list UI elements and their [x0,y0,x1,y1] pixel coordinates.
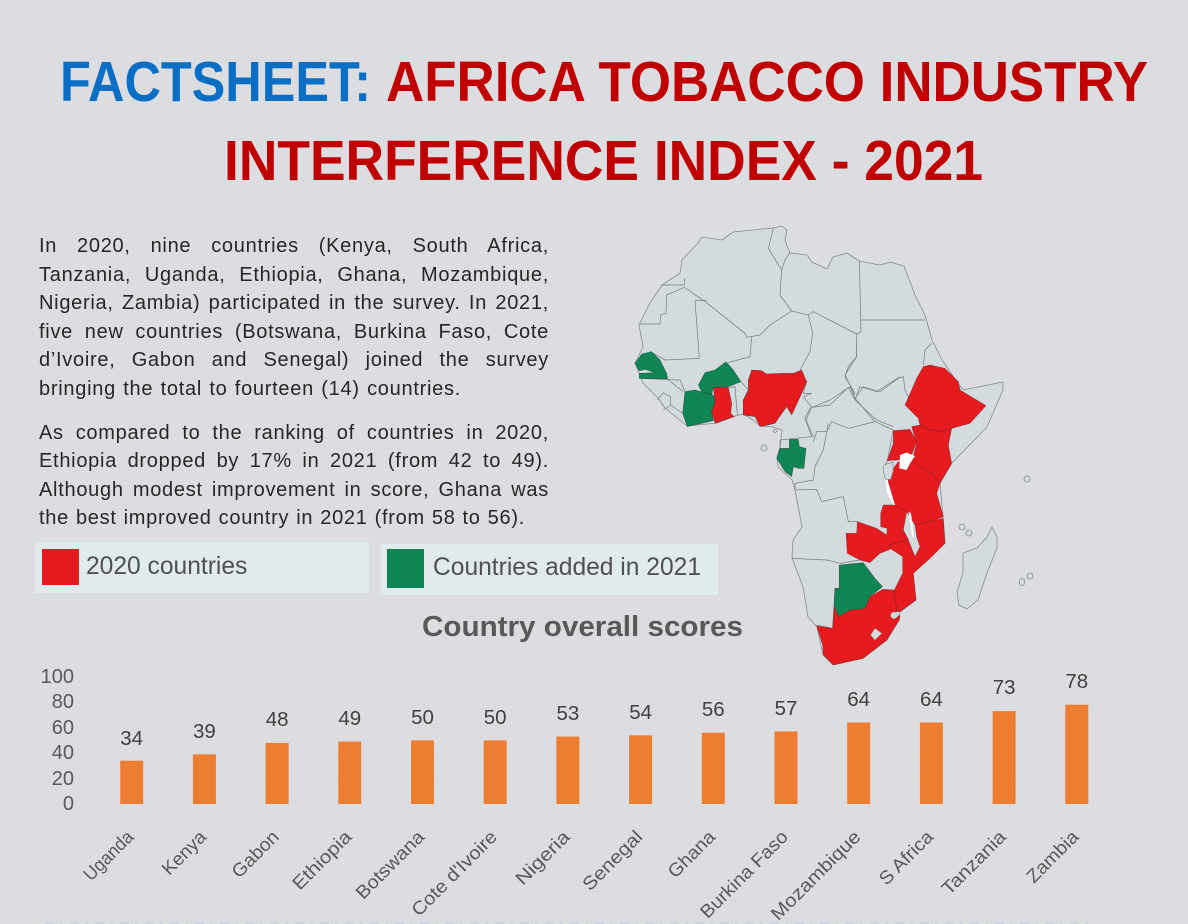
y axis labels [41,666,74,815]
country: Ghana [712,387,734,423]
country: Botswana [834,563,883,617]
text block: survey description: Nigeria, Zambia) participated in the survey. In 2021, [39,292,549,314]
chart title: Country overall scores [422,611,743,643]
country: Senegal [635,352,668,379]
country: Nigeria [743,370,807,427]
country labels: Senegal [578,826,646,895]
value labels: 54 [629,701,652,724]
y axis labels: 80 [52,691,74,713]
country labels: Nigeria [511,825,574,889]
text block: survey description: Ethiopia dropped by 17% in 2021 (from 42 to 49). [39,450,549,472]
country labels: Mozambique [766,826,865,924]
value labels: 50 [411,706,434,729]
lake: Victoria [899,453,915,470]
map: Madagascar [957,527,997,609]
map: East and southern Africa countries [777,365,986,665]
value labels [120,670,1088,750]
y axis labels: 0 [63,793,74,815]
y axis labels: 100 [41,666,74,688]
text block: survey description: Tanzania, Uganda, Ethiopia, Ghana, Mozambique, [39,264,549,286]
value labels: 53 [556,702,579,725]
y axis labels: 20 [52,768,74,790]
country labels: S Africa [874,825,938,889]
country: Tanzania [888,462,943,525]
country: Ethiopia [905,365,986,432]
text block: survey description: d’Ivoire, Gabon and Senegal) joined the survey [39,349,549,371]
title: factsheet label: FACTSHEET: [60,50,371,114]
title [60,50,1148,193]
map: West Africa 2021 additions and 2020 countries [635,352,807,427]
legend: 2020 countries [35,542,369,593]
map: continent land [635,226,1003,665]
value labels: 78 [1065,670,1088,693]
country labels: Kenya [157,825,211,879]
country labels: Uganda [79,826,138,885]
country: Eswatini [891,612,897,619]
text block: survey description [39,235,549,529]
value labels: 64 [847,688,870,711]
value labels: 73 [993,676,1016,699]
country: Gabon [777,439,806,477]
title: second line: INTERFERENCE INDEX - 2021 [224,129,983,193]
lake: Malawi [908,512,914,537]
value labels: 50 [484,706,507,729]
legend: 2020 countries: 2020 countries [86,553,247,580]
country: Lesotho [871,628,882,640]
value labels: 48 [266,708,289,731]
text block: survey description: five new countries (Botswana, Burkina Faso, Cote [39,321,549,343]
country labels [79,825,1083,924]
country: Mozambique [889,518,945,612]
y axis labels: 60 [52,717,74,739]
value labels: 49 [338,707,361,730]
text block: survey description: As compared to the ranking of countries in 2020, [39,422,549,444]
country: South Africa [817,589,900,665]
map: borders of central and southern Africa [780,340,958,628]
value labels: 57 [775,697,797,720]
country: Rwanda and Burundi [883,462,893,479]
country: Zambia [846,505,908,563]
country labels: Ethiopia [288,825,356,894]
country labels: Cote d'Ivoire [407,826,501,920]
text block: survey description: In 2020, nine countries (Kenya, South Africa, [39,235,549,257]
map: islands [761,430,1033,586]
title: first line: AFRICA TOBACCO INDUSTRY [386,50,1148,114]
legend: countries added in 2021 [381,544,718,595]
y axis labels: 40 [52,742,74,764]
text block: survey description: Although modest improvement in score, Ghana was [39,479,549,501]
value labels: 56 [702,698,725,721]
value labels: 34 [120,727,143,750]
lake: Tanganyika [885,479,895,505]
text block: survey description: bringing the total to fourteen (14) countries. [39,378,461,400]
legend: countries added in 2021: Countries added in 2021 [433,554,701,581]
text block: survey description: the best improved country in 2021 (from 58 to 56). [39,507,525,529]
country: Kenya [912,425,952,483]
country: Uganda [887,429,917,461]
country labels: Gabon [227,826,283,882]
value labels: 39 [193,720,216,743]
country labels: Tanzania [937,825,1010,899]
bars [120,705,1088,804]
country labels: Botswana [351,825,429,903]
country labels: Ghana [663,825,720,882]
country labels: Zambia [1022,825,1083,887]
country: Cote d'Ivoire [683,390,715,427]
country: Burkina Faso [698,362,741,395]
country labels: Burkina Faso [696,826,792,922]
map: borders of north and west Africa [639,228,925,437]
value labels: 64 [920,688,943,711]
